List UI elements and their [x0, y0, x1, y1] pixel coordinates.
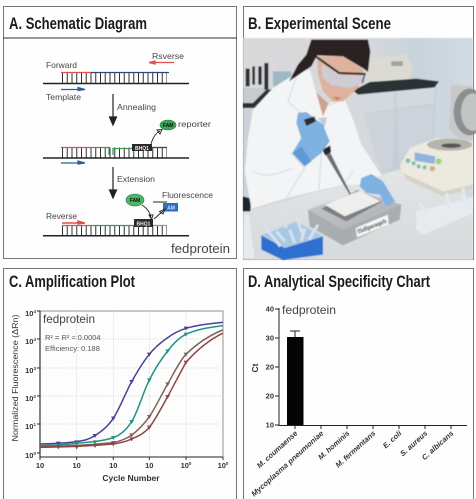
y tick labels: 10	[25, 451, 33, 460]
y tick labels	[25, 309, 36, 460]
y tick labels: 2	[33, 394, 36, 399]
arrow: reverse primer	[149, 61, 174, 64]
icon: FAM released	[126, 194, 144, 206]
label: reverse: Reverse	[46, 211, 77, 221]
curve: sample 4	[40, 333, 223, 449]
y tick labels: 4	[33, 337, 36, 342]
x tick labels: 10	[181, 461, 189, 470]
dark counter	[353, 79, 439, 95]
photo: lab scene	[243, 38, 476, 260]
curves with markers	[40, 322, 223, 449]
pipette head	[304, 116, 316, 126]
curve: sample 1	[40, 322, 223, 446]
arrow: BHQ1 to signal	[154, 209, 165, 219]
goggles	[316, 56, 366, 88]
category labels: M. coumaense	[255, 429, 299, 470]
icon: FAM reporter	[160, 120, 176, 130]
plate	[321, 190, 382, 221]
category labels	[249, 428, 455, 498]
arrow: reverse primer 2	[62, 221, 85, 224]
duplex 1	[43, 72, 189, 84]
thermal cycler	[365, 55, 413, 83]
fit statistics: R² = R² ≈ 0.0004	[45, 333, 101, 342]
x tick labels	[36, 461, 229, 470]
watermark C: fedprotein	[43, 312, 95, 326]
centrifuge lid	[449, 85, 476, 141]
y tick labels: 20	[266, 362, 274, 372]
label: forward: Forward	[46, 60, 77, 70]
panel A: schematic diagram	[3, 6, 237, 258]
arrow: FAM to BHQ1	[142, 205, 153, 220]
icon: FAM released: FAM	[130, 198, 140, 204]
icon: fluorescence signal box	[153, 202, 178, 212]
watermark A: fedprotein	[171, 241, 230, 256]
hair	[289, 40, 370, 81]
bench	[243, 170, 473, 260]
panel B: experimental scene	[243, 6, 476, 260]
clear tube rack	[416, 188, 473, 235]
quencher: BHQ1 after extension: BHQ1	[137, 221, 151, 227]
sample label: ISdlpeoqeh	[357, 218, 388, 236]
plot frame and grid	[37, 311, 223, 460]
category labels: M. fermentans	[334, 429, 377, 470]
icon: fluorescence signal box: AM	[167, 206, 175, 212]
x tick labels: 10	[73, 461, 81, 470]
y tick labels: 4	[33, 309, 36, 314]
x tick labels: 10	[36, 461, 44, 470]
x tick labels: 0	[226, 461, 229, 466]
y tick labels: 20	[266, 392, 274, 400]
arrow: extension	[110, 167, 116, 198]
category labels: C. albicans	[420, 429, 455, 462]
left cabinet	[243, 108, 253, 198]
centrifuge body	[400, 138, 473, 196]
mouth	[332, 97, 342, 100]
gloved left hand	[360, 174, 395, 206]
shelf items	[243, 63, 291, 108]
axes	[275, 308, 467, 429]
arrow: annealing	[110, 94, 116, 125]
label: template: Template	[46, 92, 81, 102]
watermark D: fedprotein	[282, 303, 336, 317]
x tick labels: 10	[109, 461, 117, 470]
heading C: C. Amplification Plot	[9, 273, 135, 291]
x tick labels: 10	[218, 461, 226, 470]
heating block	[308, 191, 401, 245]
x tick labels: 0	[189, 461, 192, 466]
label: extension: Extension	[117, 174, 155, 184]
y tick labels: 10	[266, 420, 274, 430]
label: reverse primer: Rsverse	[152, 51, 184, 61]
error bar	[290, 331, 300, 337]
heading B: B. Experimental Scene	[248, 15, 391, 33]
blue tube rack	[261, 211, 323, 260]
duplex 2	[43, 148, 189, 158]
y tick labels: 40	[266, 304, 274, 314]
bar: M. coumaense	[287, 337, 304, 425]
panel D: analytical specificity chart	[244, 268, 474, 499]
y tick labels: 10	[25, 309, 33, 318]
category labels: Mycoplasma pneumoniae	[249, 429, 325, 498]
heading A: A. Schematic Diagram	[9, 15, 147, 33]
quencher: BHQ1	[132, 144, 152, 152]
y tick labels: 1	[33, 422, 36, 427]
duplex 3	[43, 226, 189, 236]
y tick labels: 10	[25, 394, 33, 403]
y tick labels: 3	[33, 366, 36, 371]
arrow: template primer 2	[61, 161, 85, 164]
curve: sample 2	[40, 326, 223, 446]
y tick labels: 10	[25, 366, 33, 375]
lab coat	[245, 70, 381, 209]
dark chair	[243, 196, 251, 211]
label: fluorescence: Fluorescence	[162, 190, 213, 200]
pipette shaft	[323, 146, 351, 195]
cabinets	[358, 87, 436, 174]
y tick labels: 10	[25, 422, 33, 431]
gloved hand on pipette	[292, 112, 330, 166]
heading D: D. Analytical Specificity Chart	[248, 273, 430, 291]
bottle	[243, 215, 255, 258]
panel C: amplification plot	[4, 268, 236, 499]
y axis title: Normalized Fluorescence (ΔRn)	[10, 314, 20, 442]
icon: FAM reporter: FAM	[163, 123, 174, 129]
label: reporter: reporter	[178, 119, 211, 129]
curve: sample 3	[40, 330, 223, 447]
neck	[310, 88, 328, 120]
quencher: BHQ1: BHQ1	[135, 146, 149, 152]
category labels: M. hominis	[316, 429, 351, 462]
arrow: reporter to probe	[151, 130, 162, 144]
y tick labels: 30	[266, 334, 274, 342]
y tick labels: 10	[25, 337, 33, 346]
y tick labels	[266, 304, 274, 430]
category labels: S. aureus	[398, 429, 429, 458]
fit statistics: Efficiency: 0.188	[45, 344, 100, 353]
arrow: template primer	[61, 88, 85, 90]
x tick labels: 10	[145, 461, 153, 470]
face	[317, 56, 364, 102]
quencher: BHQ1 after extension	[134, 219, 153, 227]
y axis title: Ct	[250, 363, 260, 372]
fit statistics	[45, 333, 101, 353]
y tick labels: 0	[33, 451, 36, 456]
label: annealing: Annealing	[117, 102, 156, 112]
category labels: E. coli	[381, 428, 404, 450]
x axis title: Cycle Number	[102, 473, 160, 483]
